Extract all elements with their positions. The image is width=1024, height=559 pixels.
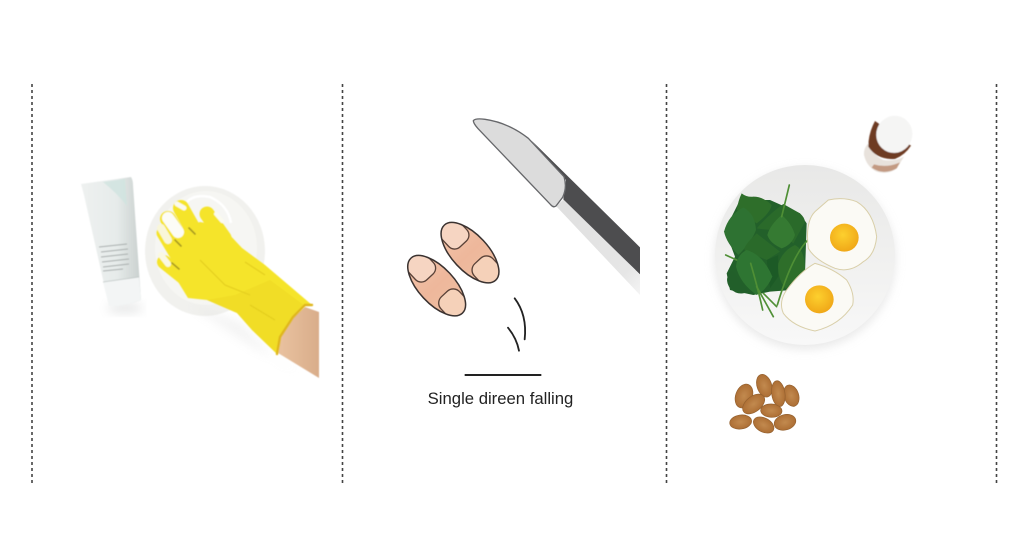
icon: falling hair strands [508,298,525,351]
panel: nutrition [715,111,918,436]
icon: supplement bottle [864,111,918,173]
panel dividers [32,84,996,483]
glove shadow [190,305,300,372]
icon: lower fingertip [407,254,466,317]
foam on fingertips [161,204,222,264]
icon: upper fingertip [440,222,500,284]
caption: Single direen falling [428,389,573,408]
icon: yellow rubber glove [161,204,312,354]
panel: gloved hand care [81,177,319,378]
icon: knife [473,119,640,295]
icon: white bowl [145,186,265,316]
infographic canvas [31,84,998,483]
icon: fried eggs [781,199,877,331]
rule above caption [465,372,541,378]
icon: arm [278,307,319,378]
icon: white plate [715,165,895,349]
icon: almonds [729,372,802,436]
icon: spinach leaves [724,185,818,317]
icon: cream tube [81,177,143,313]
panel: nail trimming illustration [393,119,640,408]
